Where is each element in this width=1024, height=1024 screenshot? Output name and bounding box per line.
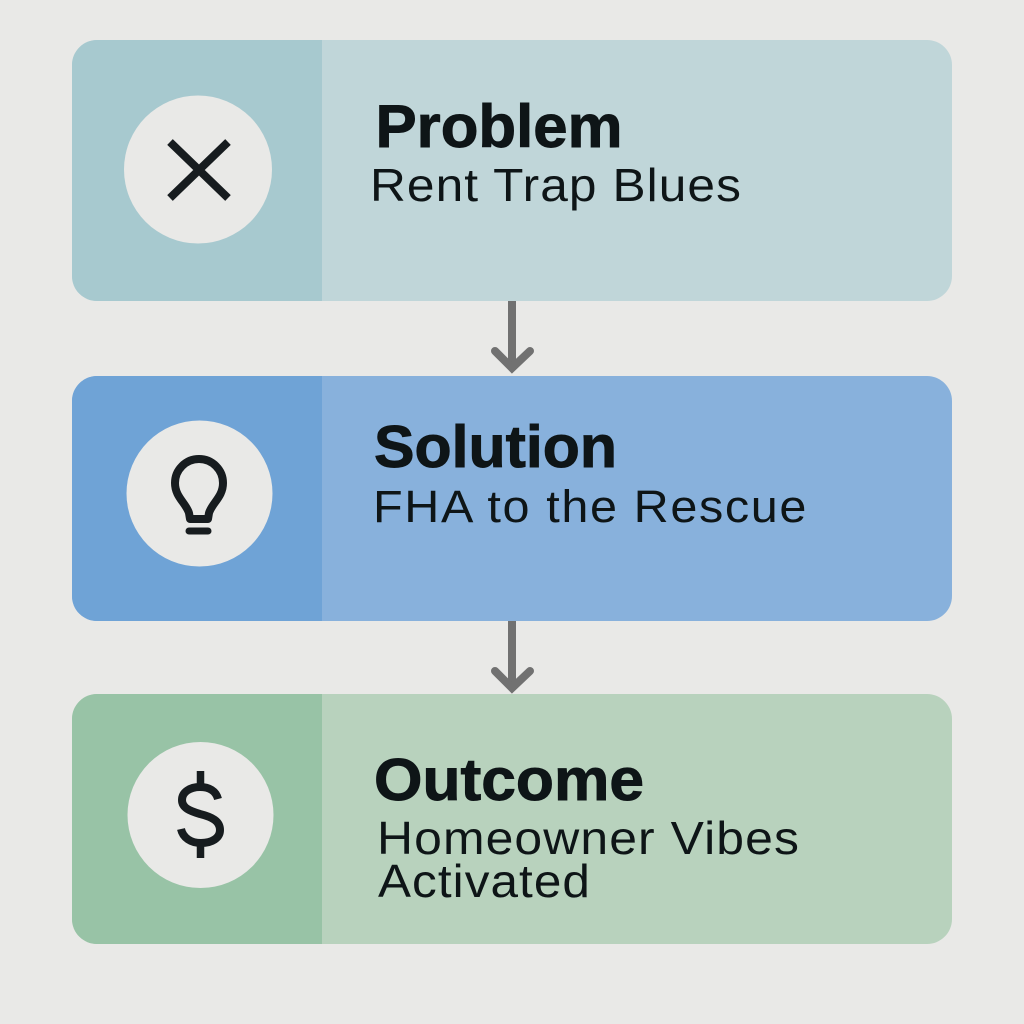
text: outcome description [377, 812, 800, 907]
infographic [72, 40, 952, 944]
arrow: solution to outcome [495, 621, 530, 688]
arrow: problem to solution [495, 301, 530, 369]
icon: cross [124, 96, 272, 244]
panel: solution [72, 376, 952, 621]
panel: problem [72, 40, 952, 301]
heading: outcome: Outcome [374, 747, 644, 813]
icon: dollar sign [128, 742, 274, 888]
icon: light bulb [126, 420, 272, 566]
heading: solution: Solution [374, 414, 617, 480]
heading: problem: Problem [376, 93, 622, 160]
text: outcome description: Activated [378, 855, 591, 907]
text: solution description: FHA to the Rescue [373, 481, 808, 532]
text: problem description: Rent Trap Blues [370, 159, 742, 211]
text: outcome description: Homeowner Vibes [377, 812, 800, 864]
panel: outcome [72, 694, 952, 944]
